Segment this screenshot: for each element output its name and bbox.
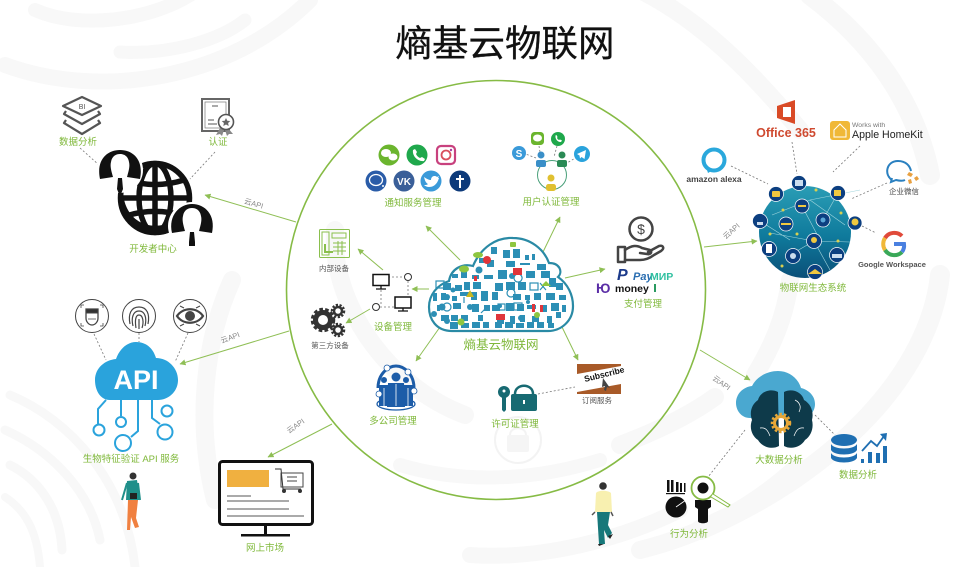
icon: outlined mosaic xyxy=(436,274,546,313)
label: notification services: 通知服务管理 xyxy=(384,197,442,209)
label: data analytics: 数据分析 xyxy=(59,136,97,148)
illustration: walking person bottom xyxy=(592,482,613,546)
icon: access control keypad xyxy=(320,230,350,258)
label: multi-company management: 多公司管理 xyxy=(369,415,417,427)
panel: developer center xyxy=(59,97,234,255)
icon: amazon alexa xyxy=(686,150,742,184)
icon: Apple HomeKit: Apple HomeKit xyxy=(852,129,923,141)
arrow: cloud API to biometric xyxy=(180,330,289,364)
panel: internal devices xyxy=(319,230,350,273)
arrow: cloud API to developer center xyxy=(205,195,296,222)
icon: LINE xyxy=(531,132,544,145)
icon: WeCom: 企业微信 xyxy=(889,186,919,196)
icon: instagram xyxy=(437,146,455,164)
icon: fingerprint xyxy=(122,300,156,332)
icon: blue icon mosaic xyxy=(433,247,566,329)
arrow: cloud API to developer center: 云API xyxy=(243,197,264,211)
label: payment management: 支付管理 xyxy=(624,298,662,310)
icon: wechat xyxy=(378,144,400,166)
label: user authentication: 用户认证管理 xyxy=(522,196,580,208)
icon: cloud outline xyxy=(429,238,573,331)
arrow: cloud API to marketplace xyxy=(268,417,332,457)
label: subscription service: 订阅服务 xyxy=(582,395,612,405)
panel: subscription service xyxy=(577,364,626,405)
icon: Office 365: Office 365 xyxy=(756,126,816,140)
icon: phone chat xyxy=(406,144,428,166)
icon: Apple HomeKit: Works with xyxy=(852,122,885,129)
icon: Google Workspace: Google Workspace xyxy=(858,260,926,269)
arrows from central cloud xyxy=(346,217,757,380)
panel: biometric API service xyxy=(76,300,206,465)
icon: face recognition xyxy=(76,300,108,332)
icon: Office 365 xyxy=(756,100,816,140)
icon: red accents xyxy=(474,256,543,320)
icon: BI layers xyxy=(63,97,101,134)
title: 熵基云物联网 xyxy=(396,23,614,64)
icon: API cloud xyxy=(95,342,178,400)
icon: YooMoney xyxy=(596,280,656,296)
central cloud: platform xyxy=(429,238,573,352)
icon: iris scan xyxy=(174,300,206,332)
label: IoT ecosystem: 物联网生态系统 xyxy=(780,282,847,294)
label: developer center: 开发者中心 xyxy=(129,243,177,255)
panel: device management xyxy=(372,274,412,333)
icon: device network xyxy=(372,274,412,311)
icon: coin and hand: $ xyxy=(637,221,645,237)
icon: telegraph circle xyxy=(450,170,470,192)
label: data analytics: 数据分析 xyxy=(839,469,877,481)
icon: amazon alexa: amazon alexa xyxy=(686,174,742,184)
label: online marketplace: 网上市场 xyxy=(246,542,284,554)
label: third-party devices: 第三方设备 xyxy=(311,340,349,350)
panel: online marketplace xyxy=(220,462,312,554)
label: device management: 设备管理 xyxy=(374,321,412,333)
main platform circle xyxy=(286,80,706,500)
icon: certificate xyxy=(202,99,234,136)
arrow: cloud API to marketplace: 云API xyxy=(285,417,306,435)
label: cloud API to IoT ecosystem: 云API xyxy=(721,221,742,241)
icon: PayPal and MIR: MИР xyxy=(650,271,673,283)
illustration: walking person left xyxy=(122,472,140,530)
icon: green accents xyxy=(458,242,551,326)
label: cloud API to big data: 云API xyxy=(711,374,732,392)
arrow: cloud API to biometric: 云API xyxy=(219,330,241,345)
panel: third-party devices xyxy=(311,305,349,350)
icon: monitor with cart xyxy=(220,462,312,536)
icon: key and lock xyxy=(498,386,537,412)
watermark bag icon xyxy=(495,417,541,463)
panel: IoT ecosystem xyxy=(686,100,926,294)
icon: PayPal and MIR xyxy=(617,267,673,284)
label: license management: 许可证管理 xyxy=(491,418,539,430)
panel: big data analytics xyxy=(708,371,887,481)
icon: PayPal and MIR: P xyxy=(617,267,628,284)
icon: IoT globe xyxy=(752,176,862,280)
icon: subscribe banner: Subscribe xyxy=(583,364,626,384)
icon: YooMoney: Ю xyxy=(596,280,610,296)
icon: user group xyxy=(536,152,567,191)
icon: BI layers: BI xyxy=(79,104,85,111)
panel: notification services xyxy=(366,144,470,209)
icon: globe with users xyxy=(97,147,216,250)
icon: YooMoney: money xyxy=(615,283,649,295)
icon: VK: VK xyxy=(397,177,412,188)
label: internal devices: 内部设备 xyxy=(319,263,349,273)
icon: Apple HomeKit xyxy=(830,121,923,141)
label: big data analytics: 大数据分析 xyxy=(755,454,803,466)
icon: circuit lines xyxy=(94,400,172,451)
icon: database and chart xyxy=(831,433,887,463)
label: platform name: 熵基云物联网 xyxy=(463,337,539,352)
icon: round mosaic xyxy=(431,266,530,324)
panel: multi-company management xyxy=(369,365,417,427)
icon: gears xyxy=(312,305,344,336)
icon: cloud with brain xyxy=(736,371,815,448)
panel: payment management xyxy=(596,218,673,310)
icon: skype: S xyxy=(516,149,523,160)
icon: person under magnifier xyxy=(692,476,730,523)
icon: WeCom xyxy=(887,161,919,196)
label: behavior analytics: 行为分析 xyxy=(670,528,708,540)
panel: license management xyxy=(491,386,539,430)
icon: telegram xyxy=(574,146,590,162)
icon: Google Workspace xyxy=(858,233,926,269)
icon: twitter xyxy=(420,170,442,192)
icon: messenger circle xyxy=(366,170,386,192)
label: biometric API service: 生物特征验证 API 服务 xyxy=(83,453,180,465)
icon: bars and pie chart xyxy=(666,480,686,518)
icon: PayPal and MIR: Pay xyxy=(633,271,653,283)
panel: behavior analytics xyxy=(666,476,730,540)
text: API: API xyxy=(113,365,159,395)
icon: business people group xyxy=(376,365,417,410)
label: certification: 认证 xyxy=(208,136,228,148)
panel: user authentication xyxy=(512,132,590,208)
icon: whatsapp xyxy=(551,132,565,146)
